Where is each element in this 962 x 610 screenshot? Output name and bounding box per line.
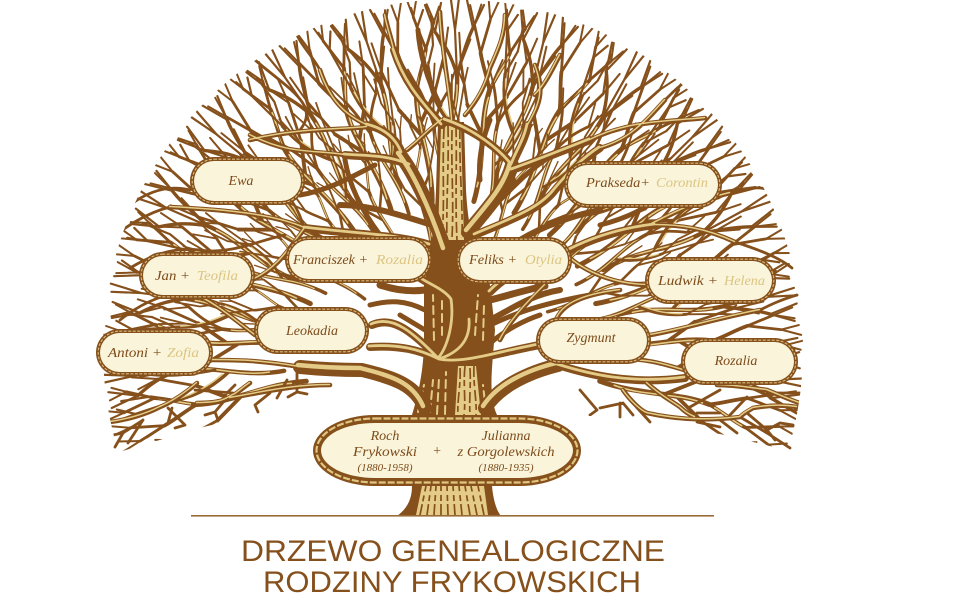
title: RODZINY FRYKOWSKICH: [263, 566, 641, 599]
root panel: Roch and Julianna: (1880-1935): [478, 462, 534, 474]
root panel: Roch and Julianna: (1880-1958): [358, 462, 413, 474]
pill: Antoni + Zofia: [96, 329, 213, 376]
pill: Ludwik + Helena: Ludwik +: [657, 274, 718, 289]
root panel: Roch and Julianna: z Gorgolewskich: [456, 445, 554, 460]
pill: Leokadia: [254, 307, 369, 354]
pill: Prakseda + Corontin: [564, 161, 722, 208]
pill: Antoni + Zofia: Zofia: [167, 346, 199, 361]
pill: Leokadia: Leokadia: [285, 324, 338, 339]
pill: Jan + Teofila: [139, 252, 255, 299]
pill: Ludwik + Helena: Helena: [723, 274, 765, 289]
pill: Antoni + Zofia: Antoni +: [107, 346, 162, 361]
pill: Feliks + Otylia: [456, 237, 572, 284]
root panel: Roch and Julianna: +: [432, 444, 442, 459]
pill: Zygmunt: Zygmunt: [566, 331, 617, 346]
title: [241, 535, 665, 599]
pill: Ewa: [190, 157, 305, 205]
root panel: Roch and Julianna: Roch: [370, 429, 399, 444]
root panel: Roch and Julianna: [313, 415, 581, 486]
pill: Prakseda + Corontin: Corontin: [656, 176, 708, 191]
pill: Franciszek + Rozalia: Franciszek +: [292, 253, 368, 268]
root panel: Roch and Julianna: Frykowski: [352, 445, 417, 460]
tree canopy branches: [99, 0, 807, 463]
pill: Zygmunt: [536, 317, 651, 364]
pill: Rozalia: [681, 338, 798, 385]
pill: Feliks + Otylia: Otylia: [525, 253, 562, 268]
pill: Franciszek + Rozalia: Rozalia: [375, 253, 423, 268]
trunk: [397, 122, 501, 516]
title: DRZEWO GENEALOGICZNE: [241, 535, 665, 568]
pill: Ewa: Ewa: [228, 174, 253, 189]
pill: Prakseda + Corontin: Prakseda+: [585, 176, 650, 191]
pill: Ludwik + Helena: [645, 257, 776, 304]
inner dark branches: [300, 30, 690, 345]
root panel: Roch and Julianna: Julianna: [482, 429, 530, 444]
pill: Rozalia: Rozalia: [714, 354, 757, 369]
pill: Feliks + Otylia: Feliks +: [468, 253, 517, 268]
ground line: [191, 515, 714, 517]
pill: Franciszek + Rozalia: [285, 236, 432, 283]
main limbs: [105, 12, 800, 448]
pill: Jan + Teofila: Teofila: [197, 269, 238, 284]
pill: Jan + Teofila: Jan +: [155, 269, 190, 284]
